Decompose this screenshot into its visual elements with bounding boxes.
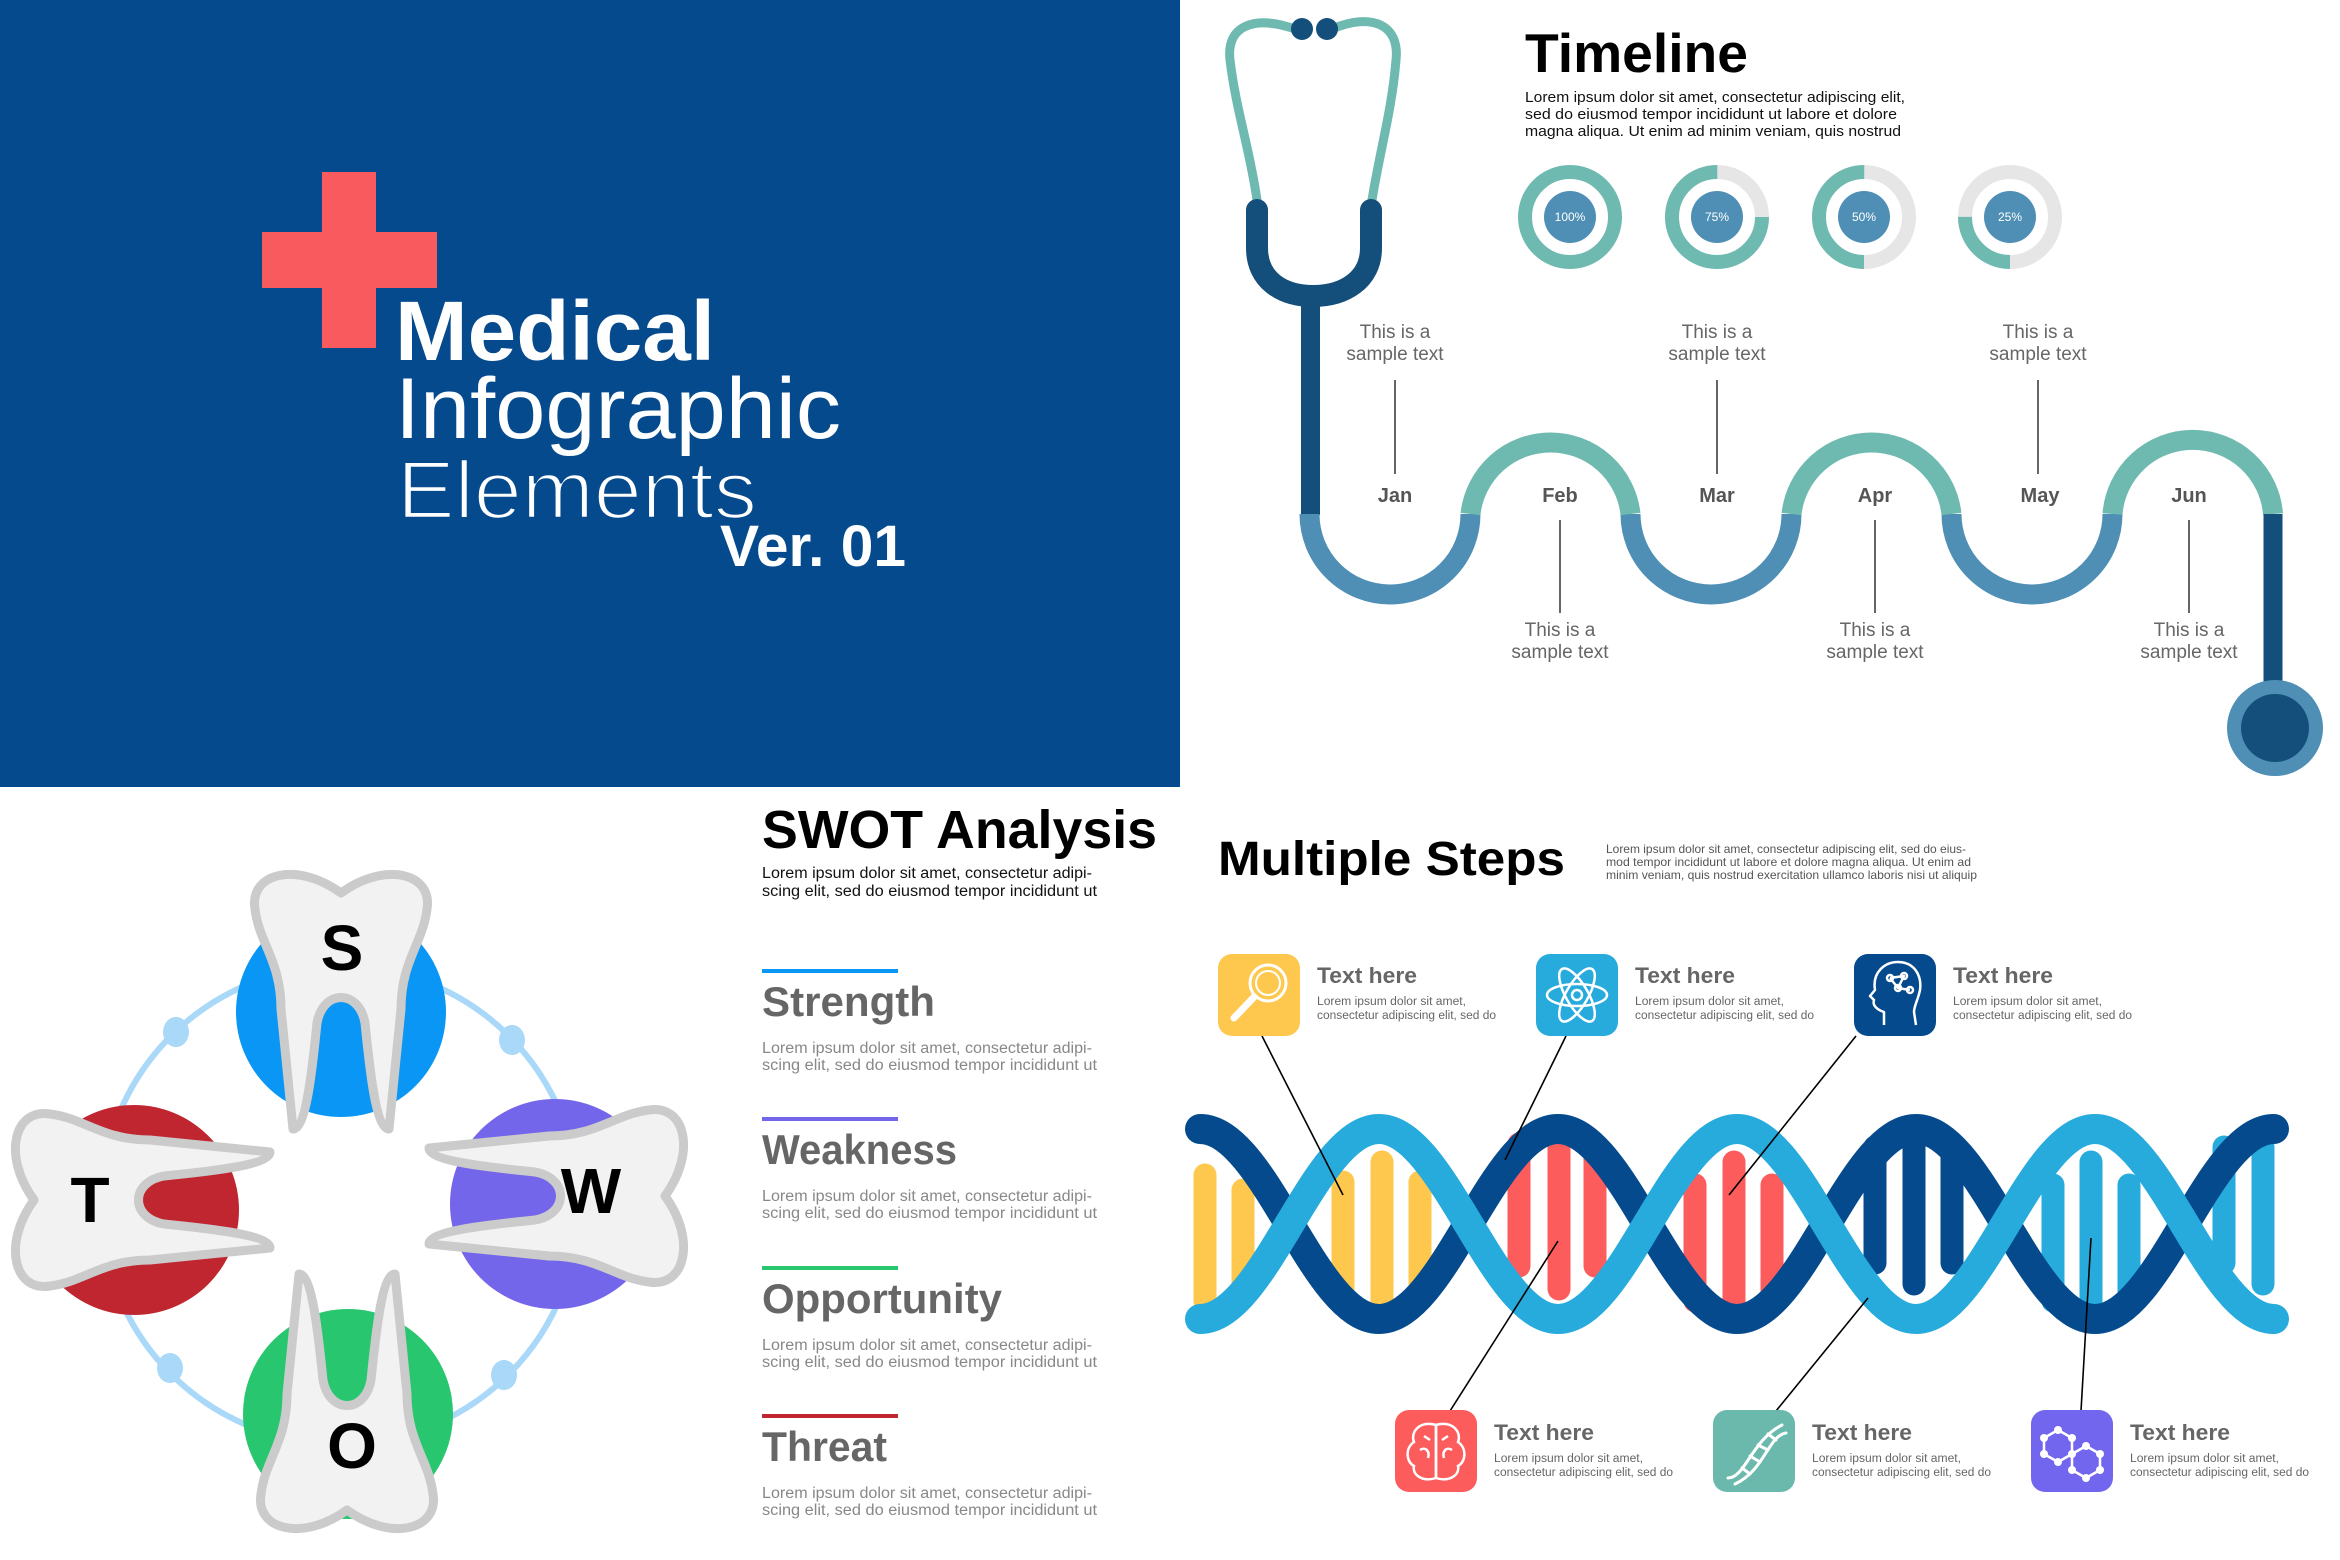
section: Weakness: scing elit, sed do eiusmod tempor incididunt ut — [762, 1205, 1098, 1222]
text block: SWOT intro: scing elit, sed do eiusmod tempor incididunt ut — [762, 883, 1098, 900]
chart: progress donuts: 25% — [1998, 210, 2022, 224]
callouts: sample texts: This is a — [1840, 620, 1911, 641]
step 3: head — [1854, 954, 2132, 1036]
text block: timeline description: Lorem ipsum dolor sit amet, consectetur adipiscing elit, — [1525, 89, 1905, 106]
SWOT letters: W — [561, 1155, 622, 1227]
section: Threat: scing elit, sed do eiusmod tempor incididunt ut — [762, 1502, 1098, 1519]
text block: steps intro: minim veniam, quis nostrud exercitation ullamco laboris nisi ut aliquip — [1606, 868, 1977, 882]
panel: SWOT graphic — [15, 874, 684, 1529]
chart: progress donuts: 100% — [1555, 210, 1586, 224]
step 2: atom — [1536, 954, 1814, 1036]
section: Strength: scing elit, sed do eiusmod tempor incididunt ut — [762, 1057, 1098, 1074]
text block: SWOT intro — [762, 865, 1098, 900]
text block: steps intro: Lorem ipsum dolor sit amet, consectetur adipiscing elit, sed do eius- — [1606, 842, 1966, 856]
panel: SWOT text — [762, 800, 1157, 1519]
chart: progress donuts: 50% — [1852, 210, 1876, 224]
step 3: head: Lorem ipsum dolor sit amet, — [1953, 996, 2102, 1008]
text block: steps intro — [1606, 842, 1977, 882]
section: Opportunity — [762, 1266, 1098, 1371]
section: Threat: Lorem ipsum dolor sit amet, consectetur adipi- — [762, 1485, 1092, 1502]
step 6: molecule: Text here — [2130, 1420, 2230, 1445]
section: Strength: Lorem ipsum dolor sit amet, consectetur adipi- — [762, 1040, 1092, 1057]
month labels: Feb — [1542, 485, 1578, 507]
SWOT letters: O — [327, 1410, 377, 1482]
callouts: sample texts — [1346, 322, 2238, 663]
section: Strength — [762, 969, 1098, 1074]
title text: Ver. 01 — [720, 514, 906, 579]
title text: Elements — [397, 445, 757, 536]
callouts: sample texts: sample text — [1668, 344, 1766, 365]
callouts: sample texts: This is a — [1682, 322, 1753, 343]
callouts: sample texts: sample text — [1346, 344, 1444, 365]
month labels — [1378, 485, 2207, 507]
SWOT letters: T — [70, 1164, 110, 1236]
icon: red cross — [262, 172, 437, 348]
step 4: brain: Lorem ipsum dolor sit amet, — [1494, 1453, 1643, 1465]
text block: timeline description: magna aliqua. Ut enim ad minim veniam, quis nostrud — [1525, 123, 1901, 140]
callouts: sample texts: sample text — [2140, 642, 2238, 663]
chart: DNA helix — [1200, 1129, 2274, 1319]
month labels: Jun — [2171, 485, 2207, 507]
callouts: sample texts: This is a — [2154, 620, 2225, 641]
step 1: magnifier: Text here — [1317, 963, 1417, 988]
callouts: sample texts: sample text — [1511, 642, 1609, 663]
month labels: Jan — [1378, 485, 1412, 507]
step 3: head: consectetur adipiscing elit, sed do — [1953, 1010, 2132, 1022]
step 5: dna icon: Text here — [1812, 1420, 1912, 1445]
text block: steps intro: mod tempor incididunt ut labore et dolore magna aliqua. Ut enim ad — [1606, 855, 1971, 869]
section: Threat: Threat — [762, 1423, 887, 1470]
SWOT letters: S — [321, 912, 363, 984]
text block: timeline description — [1525, 89, 1905, 140]
step 2: atom: Text here — [1635, 963, 1735, 988]
chart: progress donuts: 75% — [1705, 210, 1729, 224]
section: Opportunity: scing elit, sed do eiusmod tempor incididunt ut — [762, 1354, 1098, 1371]
icon: teeth — [15, 874, 684, 1529]
section: Weakness: Lorem ipsum dolor sit amet, consectetur adipi- — [762, 1188, 1092, 1205]
title text — [395, 284, 906, 579]
section: Strength: Strength — [762, 978, 935, 1025]
section: Opportunity: Lorem ipsum dolor sit amet, consectetur adipi- — [762, 1337, 1092, 1354]
icon: chest piece — [2227, 680, 2323, 776]
callouts: sample texts: This is a — [1525, 620, 1596, 641]
step 1: magnifier: Lorem ipsum dolor sit amet, — [1317, 996, 1466, 1008]
step 5: dna icon: consectetur adipiscing elit, sed do — [1812, 1467, 1991, 1479]
month labels: May — [2021, 485, 2060, 507]
callouts: sample texts: This is a — [2003, 322, 2074, 343]
icon: stethoscope — [1230, 18, 1396, 515]
section: Weakness — [762, 1117, 1098, 1222]
callouts: sample texts: sample text — [1826, 642, 1924, 663]
panel: multiple steps — [1200, 833, 2309, 1492]
section: Threat — [762, 1414, 1098, 1519]
panel: timeline — [1230, 18, 2323, 776]
section: Opportunity: Opportunity — [762, 1275, 1003, 1322]
step 4: brain: Text here — [1494, 1420, 1594, 1445]
connector lines — [1262, 1036, 2091, 1411]
step 5: dna icon — [1713, 1410, 1991, 1492]
chart: progress donuts — [1525, 172, 2055, 262]
ring with dots — [101, 966, 579, 1444]
step 6: molecule — [2031, 1410, 2309, 1492]
step 2: atom: consectetur adipiscing elit, sed do — [1635, 1010, 1814, 1022]
step 4: brain — [1395, 1410, 1673, 1492]
title text: Medical — [395, 284, 715, 378]
month labels: Apr — [1858, 485, 1892, 507]
heading: Timeline: Timeline — [1525, 22, 1748, 84]
coloured circles — [29, 907, 660, 1519]
section: Weakness: Weakness — [762, 1126, 957, 1173]
title text: Infographic — [395, 361, 841, 457]
step 4: brain: consectetur adipiscing elit, sed do — [1494, 1467, 1673, 1479]
step 1: magnifier — [1218, 954, 1496, 1036]
timeline wave — [1310, 440, 2273, 690]
text block: SWOT intro: Lorem ipsum dolor sit amet, consectetur adipi- — [762, 865, 1092, 882]
callouts: sample texts: This is a — [1360, 322, 1431, 343]
callouts: sample texts: sample text — [1989, 344, 2087, 365]
heading: Multiple Steps: Multiple Steps — [1218, 833, 1565, 886]
text block: timeline description: sed do eiusmod tempor incididunt ut labore et dolore — [1525, 106, 1897, 123]
step 6: molecule: consectetur adipiscing elit, sed do — [2130, 1467, 2309, 1479]
SWOT letters — [70, 912, 622, 1482]
month labels: Mar — [1699, 485, 1735, 507]
step 5: dna icon: Lorem ipsum dolor sit amet, — [1812, 1453, 1961, 1465]
step 2: atom: Lorem ipsum dolor sit amet, — [1635, 996, 1784, 1008]
step 6: molecule: Lorem ipsum dolor sit amet, — [2130, 1453, 2279, 1465]
step 3: head: Text here — [1953, 963, 2053, 988]
step 1: magnifier: consectetur adipiscing elit, sed do — [1317, 1010, 1496, 1022]
panel: title cover — [0, 0, 1180, 787]
heading: SWOT Analysis: SWOT Analysis — [762, 800, 1157, 860]
